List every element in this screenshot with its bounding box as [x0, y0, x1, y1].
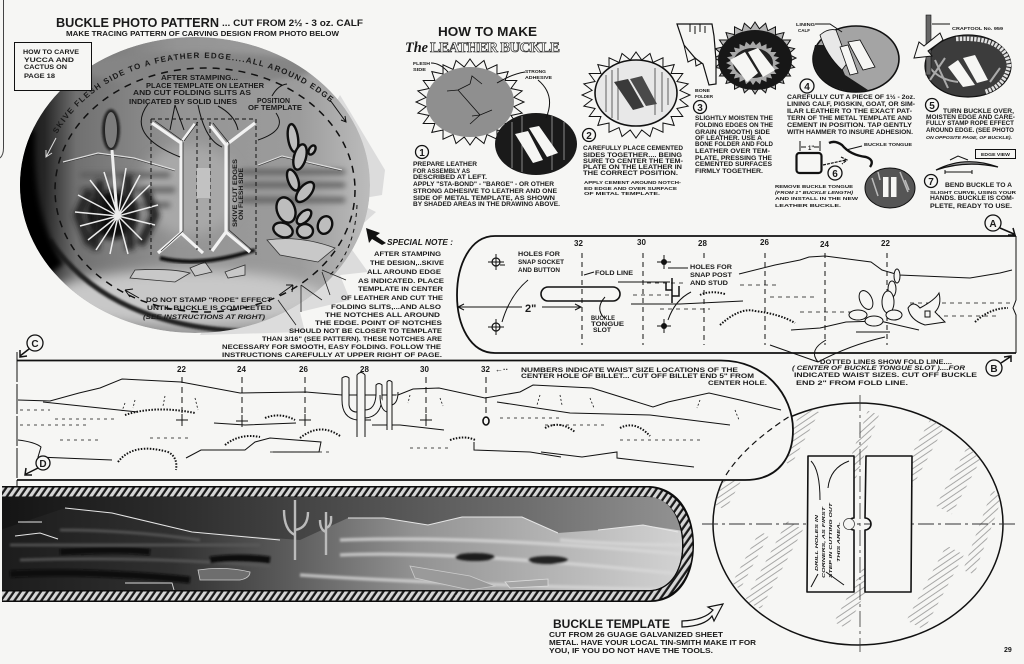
step 1 text: SIDE OF METAL TEMPLATE, AS SHOWN: [413, 196, 555, 202]
rotated template note: STEP IN CUTTING OUT: [828, 501, 833, 578]
special note: THE DESIGN,..SKIVE: [370, 261, 444, 267]
label: [796, 22, 816, 33]
rotated template note: CORNERS, AS FIRST: [821, 505, 826, 578]
saguaros: [284, 500, 331, 560]
text: buckle template: METAL. HAVE YOUR LOCAL TIN-SMITH MAKE IT FOR: [549, 640, 756, 647]
callout: dotted lines note: ( CENTER OF BUCKLE TONGUE SLOT )....FOR: [792, 366, 966, 372]
step 7 text: [930, 183, 1017, 210]
rocks: [130, 239, 335, 282]
notch lines: [278, 270, 346, 325]
center hole marks: [176, 414, 432, 427]
step 3 number: [694, 100, 706, 114]
callout: how to carve box: HOW TO CARVE: [23, 50, 79, 56]
step 5 text: MOISTEN EDGE AND CARE-: [926, 115, 1015, 121]
step 4 text: WITH HAMMER TO INSURE ADHESION.: [787, 130, 913, 136]
step 3 text: CEMENTED SURFACES: [695, 162, 772, 168]
rotated template note: [814, 501, 841, 578]
labels: FLESH: [413, 61, 431, 66]
special note: NECESSARY FOR SMOOTH, EASY FOLDING. FOLLOW THE: [222, 345, 441, 351]
title: buckle photo pattern: ... CUT FROM 2½ - 3 oz. CALF: [222, 18, 363, 29]
label D: [25, 456, 50, 475]
folding slit lines: [152, 123, 255, 253]
dashed template line on leather: [55, 68, 355, 312]
panel: finished belt photo: [0, 486, 694, 602]
title: buckle photo pattern: BUCKLE PHOTO PATTERN: [56, 15, 219, 30]
do not stamp note: UNTIL BUCKLE IS COMPLETED: [147, 306, 273, 312]
step 3 text: FIRMLY TOGETHER.: [695, 169, 763, 175]
step 3 text: LEATHER OVER TEM-: [695, 149, 770, 155]
labels and arrows: BUCKLE: [591, 316, 615, 322]
label B: [986, 356, 1011, 376]
step 6 text: LEATHER BUCKLE.: [775, 203, 841, 208]
dashed template edge inside belt: [726, 416, 790, 475]
note about waist sizes: [481, 365, 767, 387]
template slots: [807, 456, 854, 592]
step 5 text: AROUND EDGE. (SEE PHOTO: [926, 128, 1014, 134]
hand: [677, 24, 716, 85]
do not stamp note: (SEE INSTRUCTIONS AT RIGHT): [143, 315, 265, 321]
step 3 text: PLATE, PRESSING THE: [695, 156, 772, 162]
step 3 text: BONE FOLDER AND FOLD: [695, 142, 774, 148]
label: CRAFTOOL No. 959: [952, 26, 1004, 31]
label: BONE: [695, 88, 710, 93]
landscape: [18, 379, 781, 470]
step 7 text: PLETE, READY TO USE.: [930, 204, 1012, 210]
step 1 text: [413, 162, 560, 208]
step 1 text: APPLY "STA-BOND" - "BARGE" - OR OTHER: [413, 182, 555, 188]
step 5 text: ON OPPOSITE PAGE, OF BUCKLE).: [926, 135, 1012, 140]
step 5 text: TURN BUCKLE OVER,: [943, 109, 1014, 115]
step 2 text: SURE TO CENTER THE TEM-: [583, 159, 683, 165]
step 3 text: OF LEATHER. USE A: [695, 136, 763, 142]
step 5 text: [926, 109, 1015, 140]
instructions on leather: AND CUT FOLDING SLITS AS: [133, 90, 251, 97]
labels and arrows: HOLES FOR: [690, 265, 733, 271]
step 4 illustration: [796, 22, 899, 92]
cactus and skull: [849, 269, 945, 326]
cactus pads: [271, 123, 335, 240]
step 2 text: ED EDGE AND OVER SURFACE: [584, 186, 677, 191]
step 4 number: [800, 79, 814, 93]
corner drill holes and arrows: [811, 461, 849, 587]
step 2 text: OF METAL TEMPLATE.: [584, 191, 660, 196]
note about waist sizes: CENTER HOLE.: [708, 381, 767, 387]
rotated template note: THIS AREA.: [836, 522, 841, 562]
step 1 number: 1: [419, 148, 425, 159]
instructions on leather: AFTER STAMPING...: [161, 75, 238, 82]
step 7 number: [924, 174, 938, 188]
step 4 text: CEMENT IN POSITION. TAP GENTLY: [787, 123, 912, 129]
landscape: [618, 256, 1012, 332]
stamping tool: [926, 15, 931, 75]
step 7 text: HANDS. BUCKLE IS COM-: [930, 196, 1014, 202]
step 3 text: SLIGHTLY MOISTEN THE: [695, 116, 773, 122]
labels and arrows: AND BUTTON: [518, 268, 560, 274]
step 1 number: [416, 146, 428, 159]
special note: AS INDICATED. PLACE: [358, 279, 444, 285]
labels and arrows: FOLD LINE: [595, 271, 633, 277]
arrow: to buckle template: [682, 604, 723, 627]
special note: FOLDING SLITS,...AND ALSO: [331, 305, 441, 311]
saguaro cactus: [342, 372, 398, 437]
instructions on leather: SKIVE CUT EDGES: [233, 159, 239, 227]
step 1 text: BY SHADED AREAS IN THE DRAWING ABOVE.: [413, 202, 560, 208]
step 4 text: TERN OF THE METAL TEMPLATE AND: [787, 116, 913, 122]
dimension 2 inch: [458, 300, 581, 315]
label: CALF: [798, 28, 810, 33]
step 3 text: FOLDING EDGES ON THE: [695, 123, 773, 129]
label A: [985, 215, 1015, 235]
step 2 number: [582, 128, 596, 142]
label D: D: [39, 459, 47, 470]
label B: B: [990, 364, 998, 375]
label: FOLDER: [695, 94, 714, 99]
step 3 number: 3: [697, 103, 703, 114]
special note: THAN 3/16" (SEE PATTERN). THESE NOTCHES ARE: [262, 337, 442, 343]
waist size numbers: 28: [360, 365, 369, 374]
panel: belt pattern section C-D: [17, 352, 793, 490]
waist size numbers: 26: [299, 365, 308, 374]
note about waist sizes: ←··: [495, 365, 508, 374]
step 5 number: [926, 98, 938, 112]
callout: how to carve box: YUCCA AND: [24, 58, 75, 64]
waist size numbers: 30: [637, 238, 646, 247]
labels and arrows: AND STUD: [690, 281, 729, 287]
waist size numbers: 24: [820, 240, 829, 249]
special note: ALL AROUND EDGE: [367, 270, 441, 276]
instructions on leather: POSITION: [257, 98, 290, 105]
step 2 text: [583, 146, 684, 196]
page number: 29: [1004, 647, 1012, 654]
title: buckle photo pattern: MAKE TRACING PATTERN OF CARVING DESIGN FROM PHOTO BELOW: [66, 31, 339, 38]
label: BUCKLE TONGUE: [864, 142, 912, 147]
waist size numbers: 32: [574, 239, 583, 248]
waist size numbers: 22: [881, 239, 890, 248]
curved skive text: [57, 58, 330, 134]
step 7 text: BEND BUCKLE TO A: [945, 183, 1013, 189]
step 6 text: [775, 184, 859, 208]
heading: how to make the leather buckle: LEATHER BUCKLE: [430, 40, 560, 56]
callout arrows on leather: [141, 84, 287, 157]
step 4 text: ILAR LEATHER TO THE EXACT PAT-: [787, 109, 912, 115]
step 4 text: CAREFULLY CUT A PIECE OF 1½ - 2oz.: [787, 94, 915, 101]
panel: buckle template: [702, 395, 1018, 652]
callout: how to carve box: PAGE 18: [24, 74, 56, 80]
callout: dotted lines note: END 2" FROM FOLD LINE.: [796, 381, 908, 387]
labels: SIDE: [413, 67, 426, 72]
step 4 text: [787, 94, 915, 136]
step 6 text: (FROM 1" BUCKLE LENGTH): [775, 190, 854, 195]
labels and arrows: TONGUE: [591, 322, 624, 328]
ridge highlights: [15, 508, 678, 540]
labels and arrows: [500, 252, 733, 334]
waist size numbers: 28: [698, 239, 707, 248]
step 2 text: APPLY CEMENT AROUND NOTCH-: [584, 180, 682, 185]
step 6 illustration: [796, 141, 915, 208]
special note: OF LEATHER AND CUT THE: [341, 296, 443, 302]
step 3 text: [695, 116, 774, 175]
callout: how to carve box: CACTUS ON: [24, 65, 67, 71]
step 2 number: 2: [586, 131, 592, 142]
step 1 text: STRONG ADHESIVE TO LEATHER AND ONE: [413, 189, 557, 195]
instructions on leather: PLACE TEMPLATE ON LEATHER: [146, 83, 264, 90]
notched light edge of leather: [200, 95, 385, 335]
callout: dotted lines note: INDICATED WAIST SIZES. CUT OFF BUCKLE: [794, 373, 977, 379]
special note: SHOULD NOT BE CLOSER TO TEMPLATE: [289, 329, 442, 335]
horizon: [63, 153, 342, 170]
label A: A: [989, 219, 997, 230]
instructions on leather: OF TEMPLATE: [248, 105, 302, 112]
leather oval: [20, 37, 370, 333]
heading: how to make the leather buckle: HOW TO MAKE: [438, 25, 537, 39]
step 7 illustration: EDGE VIEW: [981, 152, 1011, 157]
template position dashed box: [151, 119, 256, 255]
note about waist sizes: CENTER HOLE OF BILLET... CUT OFF BILLET END 5" FROM: [521, 374, 754, 380]
step 6 text: REMOVE BUCKLE TONGUE: [775, 184, 853, 189]
waist size numbers: [574, 238, 890, 249]
step 6 illustration: 1": [808, 146, 814, 152]
label C: C: [31, 339, 39, 350]
step 2 text: SIDES TOGETHER.... BEING: [583, 153, 682, 159]
step 1 text: PREPARE LEATHER: [413, 162, 478, 168]
callout: dotted lines note: DOTTED LINES SHOW FOLD LINE....: [820, 360, 952, 366]
step 7 text: SLIGHT CURVE, USING YOUR: [930, 190, 1017, 195]
step 6 number: 6: [832, 169, 838, 180]
dimension 2 inch: 2": [525, 303, 536, 315]
step 5 illustration: [914, 15, 1011, 97]
step 1 text: FOR ASSEMBLY AS: [413, 169, 470, 175]
ground: [194, 518, 682, 590]
step 4 text: LINING CALF, PIGSKIN, GOAT, OR SIM-: [787, 102, 915, 108]
text: buckle template: [549, 619, 756, 655]
callout: dotted lines note: [770, 337, 977, 387]
step 6 text: AND INSTALL IN THE NEW: [775, 196, 859, 201]
panel: buckle photo with template overlay: [20, 37, 385, 335]
panel: buckle photo with template overlay: SKIVE FLESH SIDE TO A FEATHER EDGE....ALL AROUND EDGE: [53, 52, 334, 134]
labels: ADHESIVE: [525, 75, 552, 80]
step 6 number: [828, 166, 842, 180]
instructions on leather: ON FLESH SIDE: [239, 168, 245, 220]
special note: THE NOTCHES ALL AROUND: [325, 313, 441, 319]
labels and arrows: SNAP SOCKET: [518, 260, 564, 266]
step 2 illustration: [582, 52, 690, 138]
callout: how to carve box: [14, 42, 92, 90]
step 4 number: 4: [804, 82, 810, 93]
title: buckle photo pattern: [56, 15, 363, 38]
step 7 number: 7: [928, 177, 934, 188]
step 1 illustration: [413, 59, 577, 175]
label C: [20, 335, 43, 357]
step 2 text: PLATE ON THE LEATHER IN: [583, 165, 682, 171]
text: buckle template: CUT FROM 26 GUAGE GALVANIZED SHEET: [549, 632, 724, 639]
step 2 text: THE CORRECT POSITION.: [583, 171, 678, 177]
step 3 illustration with hand: [677, 22, 796, 99]
heading: how to make the leather buckle: [405, 25, 560, 56]
note about waist sizes: 32: [481, 365, 490, 374]
waist size numbers: 24: [237, 365, 246, 374]
buckle tongue slot: [541, 287, 620, 301]
step 3 text: GRAIN (SMOOTH) SIDE: [695, 130, 770, 136]
labels: [413, 61, 552, 80]
waist size numbers: [177, 365, 429, 374]
step 2 text: CAREFULLY PLACE CEMENTED: [583, 146, 684, 152]
label: LINING: [796, 22, 816, 27]
panel: belt pattern section A-B: [457, 236, 1016, 353]
special note: SPECIAL NOTE :: [387, 237, 453, 247]
step 5 number: 5: [929, 101, 935, 112]
yucca plant: [75, 109, 158, 254]
labels and arrows: SLOT: [593, 328, 611, 334]
do not stamp note: [143, 298, 273, 321]
rotated template note: DRILL HOLES IN: [814, 514, 819, 571]
label: [695, 88, 714, 99]
step 5 text: FULLY STAMP ROPE EFFECT: [926, 121, 1014, 127]
special note: THE EDGE. POINT OF NOTCHES: [315, 321, 442, 327]
special note: AFTER STAMPING: [374, 252, 441, 258]
note about waist sizes: NUMBERS INDICATE WAIST SIZE LOCATIONS OF THE: [521, 368, 738, 374]
heading: how to make the leather buckle: The: [405, 40, 428, 56]
special note: INSTRUCTIONS CAREFULLY AT UPPER RIGHT OF PAGE.: [222, 353, 442, 359]
waist size numbers: 30: [420, 365, 429, 374]
labels and arrows: SNAP POST: [690, 273, 732, 279]
special note: [222, 228, 453, 359]
instructions on leather: [129, 75, 302, 227]
special note: TEMPLATE IN CENTER: [358, 287, 444, 293]
do not stamp note: DO NOT STAMP "ROPE" EFFECT: [146, 298, 272, 304]
waist size numbers: 26: [760, 238, 769, 247]
step 1 text: DESCRIBED AT LEFT.: [413, 175, 487, 181]
labels: STRONG: [525, 69, 546, 74]
waist size numbers: 22: [177, 365, 186, 374]
text: buckle template: BUCKLE TEMPLATE: [553, 619, 670, 631]
text: buckle template: YOU, IF YOU DO NOT HAVE THE TOOLS.: [549, 648, 713, 655]
arrow: special note pointer: [366, 228, 386, 245]
snap holes: [488, 254, 671, 335]
labels and arrows: HOLES FOR: [518, 252, 561, 258]
instructions on leather: INDICATED BY SOLID LINES: [129, 99, 237, 106]
step 7 illustration: [936, 150, 1016, 174]
